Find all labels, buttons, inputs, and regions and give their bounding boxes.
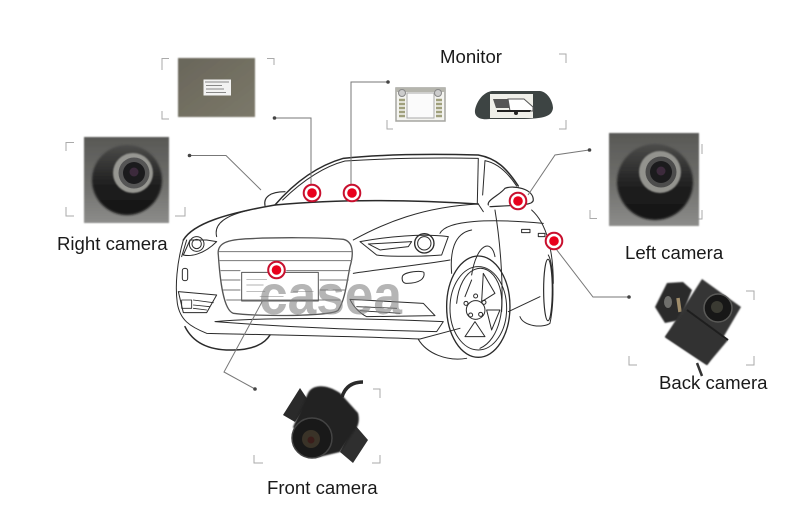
front camera photo	[254, 382, 380, 463]
label: front camera: Front camera	[267, 477, 378, 498]
marker: left camera	[510, 193, 526, 209]
leader: monitor	[351, 80, 390, 185]
marker: control box	[304, 185, 320, 201]
label: right camera: Right camera	[57, 233, 168, 254]
leader: right camera	[188, 154, 261, 190]
label: back camera: Back camera	[659, 372, 768, 393]
marker: front camera	[268, 262, 285, 278]
control box photo	[162, 58, 274, 119]
leader: left camera	[528, 148, 591, 195]
back camera photo	[629, 279, 754, 376]
monitor photos	[387, 54, 566, 129]
leader: control box	[273, 116, 311, 185]
leader: front camera	[224, 300, 263, 391]
label: left camera: Left camera	[625, 242, 724, 263]
red location markers	[268, 185, 562, 278]
callout leader lines	[188, 80, 631, 391]
mirror monitor	[475, 91, 553, 119]
marker: back camera	[546, 233, 562, 249]
heading: Monitor: Monitor	[440, 46, 502, 67]
right camera photo	[66, 137, 185, 223]
car line drawing	[176, 154, 553, 359]
watermark: casea: casea	[259, 263, 403, 326]
marker: monitor	[344, 185, 360, 201]
leader: back camera	[553, 245, 631, 299]
left camera photo	[590, 133, 702, 226]
head unit	[396, 88, 445, 121]
